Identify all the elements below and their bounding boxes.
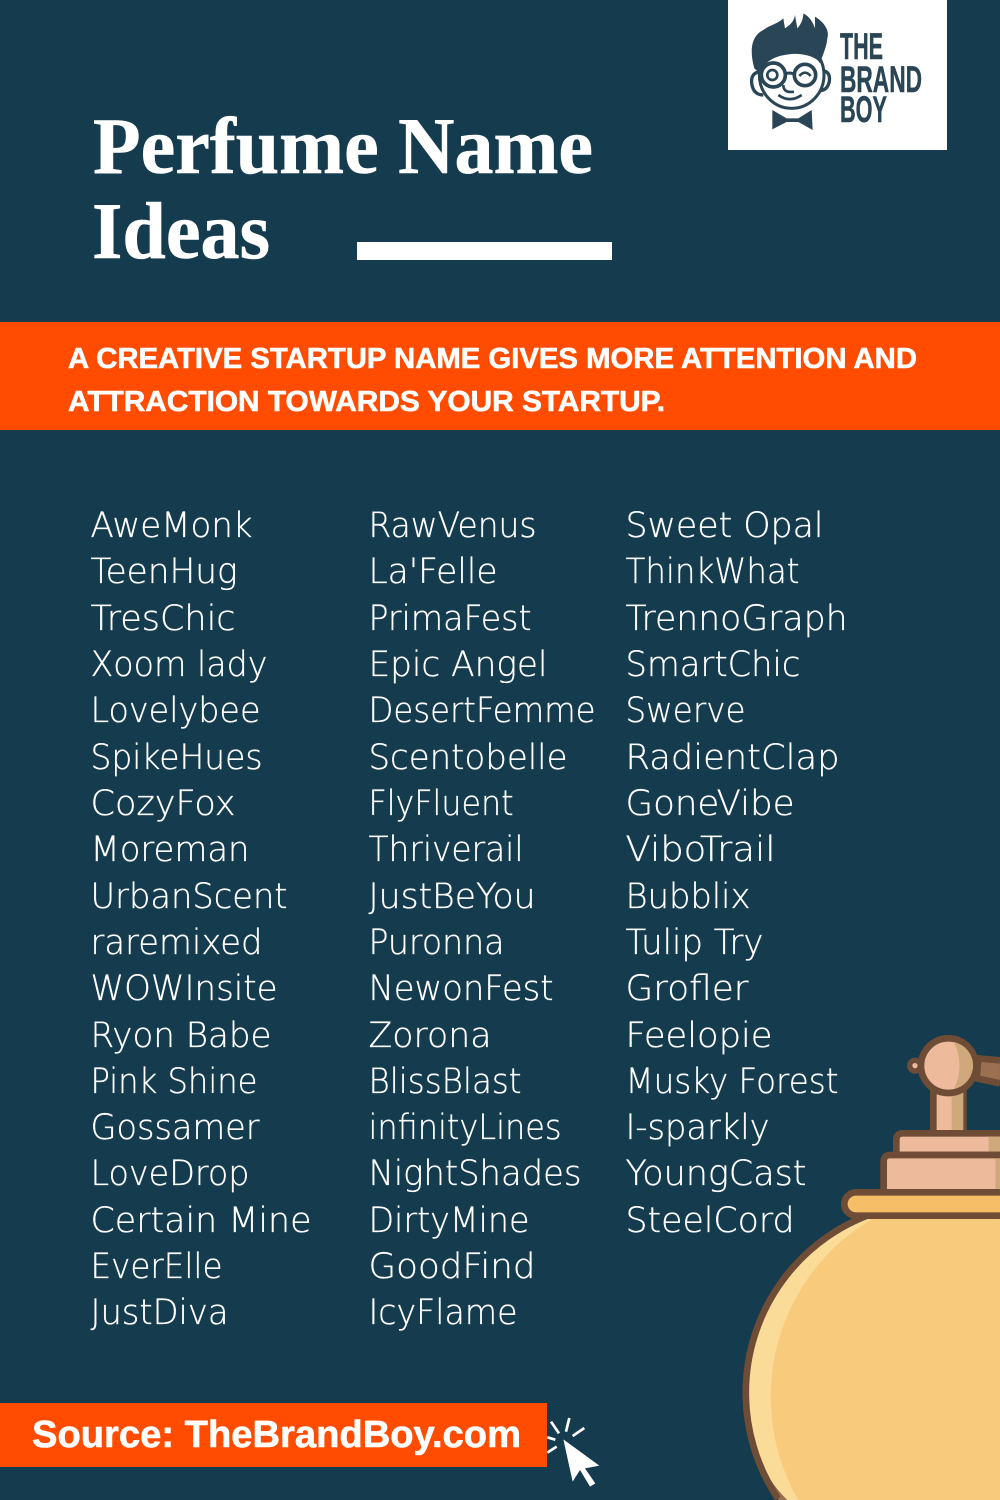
name list: column 2: JustBeYou (368, 877, 536, 917)
icon: boy face with glasses and bow tie (752, 13, 830, 130)
name list: column 2: Scentobelle (368, 738, 568, 778)
name list: column 2: IcyFlame (368, 1293, 518, 1333)
name list: column 3: RadientClap (626, 738, 840, 778)
name list: column 1: TeenHug (90, 552, 238, 592)
logo wordmark (840, 26, 922, 130)
source bar: Source: TheBrandBoy.com (32, 1414, 521, 1456)
name list: column 1: Xoom lady (90, 645, 268, 685)
title: Ideas (92, 188, 270, 276)
name list: column 1: CozyFox (90, 784, 236, 824)
name list: column 1: EverElle (90, 1247, 222, 1287)
name list: column 2: DesertFemme (368, 691, 596, 731)
name list: column 2: Zorona (368, 1016, 492, 1056)
name list: column 2: PrimaFest (368, 599, 532, 639)
name list: column 2: RawVenus (368, 506, 536, 546)
name list: column 2 (368, 506, 596, 1333)
name list: column 1: Ryon Babe (90, 1016, 272, 1056)
name list: column 3 (626, 506, 848, 1241)
name list: column 1: Gossamer (90, 1108, 260, 1148)
name list: column 3: GoneVibe (626, 784, 794, 824)
name list: column 2: DirtyMine (368, 1201, 530, 1241)
name list: column 3: ThinkWhat (626, 552, 800, 592)
name list: column 3: SteelCord (626, 1201, 794, 1241)
name list: column 2: NewonFest (368, 969, 554, 1009)
name list: column 3: Tulip Try (626, 923, 764, 963)
name list: column 3: Musky Forest (626, 1062, 838, 1102)
name list: column 1: Moreman (90, 830, 250, 870)
name list: column 3: Sweet Opal (626, 506, 824, 546)
banner: tagline: A CREATIVE STARTUP NAME GIVES MORE ATTENTION AND (68, 343, 917, 375)
name list: column 2: FlyFluent (368, 784, 514, 824)
banner: tagline (0, 322, 1000, 430)
logo wordmark: BRAND (840, 59, 922, 100)
name list: column 1: AweMonk (90, 506, 252, 546)
title (92, 103, 593, 276)
name list: column 3: Grofler (626, 969, 749, 1009)
name list: column 3: Bubblix (626, 877, 750, 917)
icon: cursor click (547, 1418, 599, 1487)
name list: column 1: JustDiva (90, 1293, 228, 1333)
name list: column 2: BlissBlast (368, 1062, 522, 1102)
title: Perfume Name (93, 103, 593, 191)
name list: column 1: Certain Mine (90, 1201, 312, 1241)
name list: column 2: infinityLines (368, 1108, 562, 1148)
source bar (0, 1403, 547, 1467)
name list: column 1: raremixed (90, 923, 262, 963)
name list: column 1 (90, 506, 312, 1333)
name list: column 1: LoveDrop (90, 1154, 250, 1194)
name list: column 2: Epic Angel (368, 645, 548, 685)
name list: column 3: I-sparkly (626, 1108, 770, 1148)
name list: column 2: La'Felle (368, 552, 498, 592)
name list: column 3: Feelopie (626, 1016, 772, 1056)
logo: The Brand Boy (728, 0, 947, 150)
name list: column 3: SmartChic (626, 645, 800, 685)
name list: column 1: WOWInsite (90, 969, 278, 1009)
name list: column 2: GoodFind (368, 1247, 536, 1287)
name list: column 3: ViboTrail (626, 830, 776, 870)
name list: column 1: Pink Shine (90, 1062, 258, 1102)
name list: column 2: Puronna (368, 923, 504, 963)
name list: column 3: TrennoGraph (626, 599, 848, 639)
logo wordmark: BOY (840, 89, 887, 130)
name list: column 3: Swerve (626, 691, 746, 731)
logo wordmark: THE (840, 26, 883, 67)
name list: column 1: Lovelybee (90, 691, 260, 731)
name list: column 3: YoungCast (626, 1154, 806, 1194)
name list: column 1: SpikeHues (90, 738, 262, 778)
name list: column 2: NightShades (368, 1154, 582, 1194)
banner: tagline: ATTRACTION TOWARDS YOUR STARTUP. (68, 386, 665, 418)
illustration: perfume bottle (746, 1038, 1000, 1500)
name list: column 1: UrbanScent (90, 877, 288, 917)
name list: column 2: Thriverail (368, 830, 524, 870)
name list: column 1: TresChic (90, 599, 236, 639)
